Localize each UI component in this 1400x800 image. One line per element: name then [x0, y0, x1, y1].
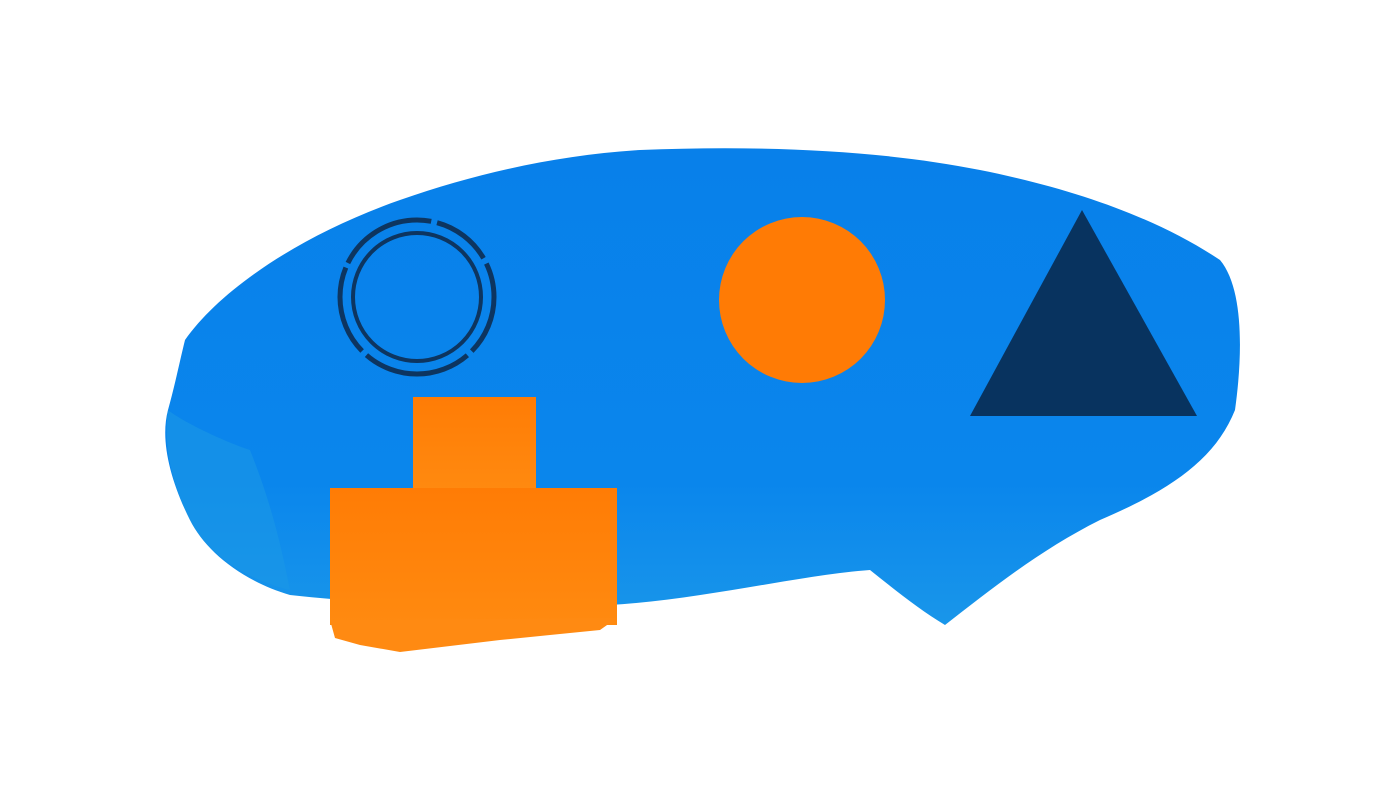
blue brush stroke background	[165, 148, 1240, 625]
icon: navy triangle	[970, 210, 1197, 416]
icon: orange stepped block	[330, 397, 617, 652]
icon: double ring	[340, 220, 494, 374]
icon: orange circle	[719, 217, 885, 383]
